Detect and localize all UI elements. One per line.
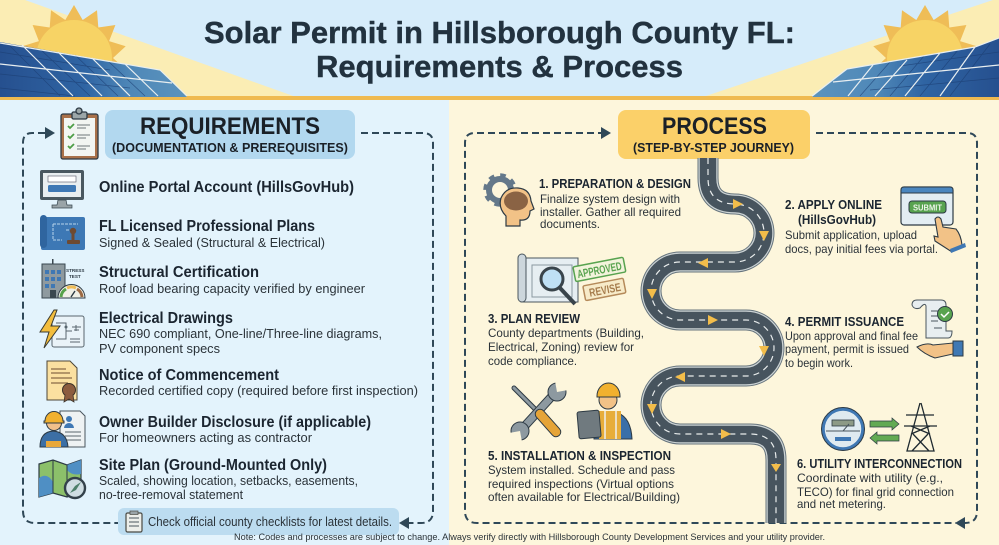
item: licensed plans: Signed & Sealed (Structural & Electrical) <box>99 235 325 250</box>
item: owner builder disclosure: For homeowners acting as contractor <box>99 430 313 445</box>
item: notice of commencement <box>47 361 418 402</box>
step 6: utility interconnection: TECO) for final grid connection <box>797 485 954 499</box>
item: structural certification <box>42 259 366 298</box>
step 5: installation and inspection: System installed. Schedule and pass <box>488 463 675 477</box>
item: notice of commencement: Notice of Commencement <box>99 367 280 384</box>
step 3: plan review: 3. PLAN REVIEW <box>488 312 580 326</box>
item: structural certification: Structural Certification <box>99 264 259 281</box>
heading: process: PROCESS <box>662 113 767 140</box>
item: online portal account: Online Portal Account (HillsGovHub) <box>99 179 354 196</box>
icon: gear and head <box>486 176 534 226</box>
icon: submit window and hand: SUBMIT <box>913 204 942 212</box>
step 1: preparation and design: installer. Gather all required <box>540 205 681 219</box>
step 2: apply online: (HillsGovHub) <box>798 213 876 227</box>
item: electrical drawings: PV component specs <box>99 341 220 356</box>
step 6: utility interconnection: Coordinate with utility (e.g., <box>797 471 943 485</box>
step 5: installation and inspection: often available for Electrical/Building) <box>488 490 680 504</box>
icon: meter, arrows and transmission tower <box>822 403 937 451</box>
dashed loop: requirements <box>23 127 433 529</box>
icon: plan with magnifier and stamps: REVISE <box>588 282 622 300</box>
icon: monitor <box>40 170 84 208</box>
icon: inspector with tablet <box>577 383 632 439</box>
item: electrical drawings: NEC 690 compliant, One-line/Three-line diagrams, <box>99 326 382 341</box>
step 1: preparation and design <box>486 176 691 231</box>
icon: plan with magnifier and stamps: APPROVED <box>576 261 623 281</box>
step 1: preparation and design: Finalize system design with <box>540 192 680 206</box>
item: electrical drawings <box>40 310 382 356</box>
heading: process <box>618 110 810 159</box>
step 2: apply online: docs, pay initial fees via portal. <box>785 242 938 256</box>
icon: permit scroll and hand <box>912 300 963 358</box>
item: licensed plans: FL Licensed Professional Plans <box>99 218 315 235</box>
step 3: plan review: Electrical, Zoning) review for <box>488 340 634 354</box>
footnote: Note: Codes and processes are subject to change. Always verify directly with Hillsborough County Development Services and your utility provider. <box>234 532 825 543</box>
dashed loop: process <box>465 127 977 529</box>
item: owner builder disclosure <box>40 411 371 447</box>
step 4: permit issuance: Upon approval and final fee <box>785 329 918 343</box>
step 2: apply online: 2. APPLY ONLINE <box>785 198 882 212</box>
icon: plan with magnifier and stamps <box>518 254 626 304</box>
panel: requirements <box>23 108 433 535</box>
icon: left sun and solar panels <box>0 5 187 97</box>
heading: requirements: REQUIREMENTS <box>140 113 320 140</box>
item: owner builder disclosure: Owner Builder Disclosure (if applicable) <box>99 414 371 431</box>
step 5: installation and inspection: required inspections (Virtual options <box>488 477 674 491</box>
step 3: plan review: County departments (Building, <box>488 326 644 340</box>
item: notice of commencement: Recorded certified copy (required before first inspection) <box>99 383 418 398</box>
step 3: plan review <box>488 254 644 368</box>
icon: right sun and solar panels <box>812 5 999 97</box>
panel: process <box>465 110 977 529</box>
step 6: utility interconnection: and net metering. <box>797 497 886 511</box>
callout: check county checklists <box>118 508 399 535</box>
step 2: apply online: Submit application, upload <box>785 228 917 242</box>
icon: clipboard <box>61 108 98 159</box>
icon: building with gauge: TEST <box>69 274 81 279</box>
item: site plan: no-tree-removal statement <box>99 487 243 502</box>
icon: wrench and screwdriver <box>509 381 568 442</box>
winding road <box>647 158 781 523</box>
step 3: plan review: code compliance. <box>488 354 577 368</box>
icon: certificate <box>47 361 77 402</box>
icon: building with gauge <box>42 259 85 298</box>
step 4: permit issuance: to begin work. <box>785 356 853 370</box>
step 6: utility interconnection <box>797 403 962 511</box>
heading: requirements: (DOCUMENTATION & PREREQUISITES) <box>112 141 348 155</box>
step 6: utility interconnection: 6. UTILITY INTERCONNECTION <box>797 457 962 471</box>
icon: map and compass <box>39 460 85 498</box>
item: site plan <box>39 457 358 502</box>
item: site plan: Site Plan (Ground-Mounted Only) <box>99 457 327 474</box>
icon: building with gauge: STRESS <box>66 268 84 273</box>
step 4: permit issuance <box>785 300 963 370</box>
callout: check county checklists: Check official county checklists for latest details. <box>148 514 392 529</box>
item: licensed plans <box>40 215 325 250</box>
item: structural certification: Roof load bearing capacity verified by engineer <box>99 281 366 296</box>
item: online portal account <box>40 170 354 208</box>
item: electrical drawings: Electrical Drawings <box>99 310 233 327</box>
step 1: preparation and design: 1. PREPARATION & DESIGN <box>539 177 691 191</box>
step 4: permit issuance: 4. PERMIT ISSUANCE <box>785 315 904 329</box>
item: site plan: Scaled, showing location, setbacks, easements, <box>99 473 358 488</box>
title <box>204 15 795 84</box>
step 2: apply online <box>785 187 966 256</box>
step 5: installation and inspection <box>488 381 680 504</box>
title: Solar Permit in Hillsborough County FL: <box>204 15 795 50</box>
step 5: installation and inspection: 5. INSTALLATION & INSPECTION <box>488 449 671 463</box>
step 1: preparation and design: documents. <box>540 217 600 231</box>
step 4: permit issuance: payment, permit is issued <box>785 342 909 356</box>
icon: worker and form <box>40 411 85 447</box>
heading: requirements <box>105 110 355 159</box>
header banner <box>0 0 999 100</box>
title: Requirements & Process <box>316 49 683 84</box>
icon: lightning and schematic <box>40 310 84 348</box>
icon: submit window and hand <box>901 187 966 253</box>
icon: blueprint with stamp <box>40 215 85 250</box>
heading: process: (STEP-BY-STEP JOURNEY) <box>633 141 794 155</box>
